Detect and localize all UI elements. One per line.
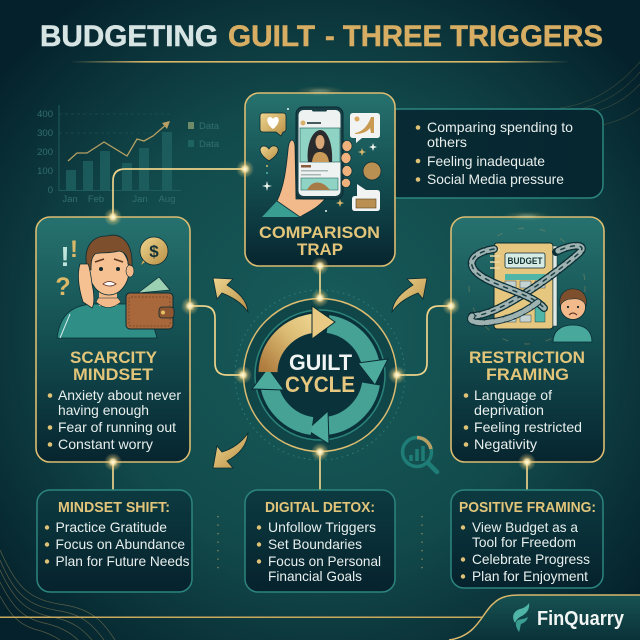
arrow: gold cycle segment bbox=[268, 306, 335, 372]
heading: comparison trap: COMPARISON bbox=[259, 223, 380, 242]
panel: comparison details bbox=[385, 109, 603, 198]
logo wordmark: FinQuarry bbox=[537, 608, 625, 630]
bullet list: digital detox bbox=[257, 519, 381, 584]
bullet list: digital detox: Focus on Personal bbox=[268, 553, 381, 569]
bullet list: positive framing: Tool for Freedom bbox=[472, 534, 576, 550]
title underline bbox=[70, 61, 570, 63]
bullet list: scarcity: Constant worry bbox=[58, 436, 153, 452]
icon: sad person bbox=[553, 289, 592, 342]
icon: gold heart bbox=[260, 146, 278, 161]
heading: restriction framing: RESTRICTION bbox=[469, 348, 585, 367]
guilt cycle diagram bbox=[235, 290, 405, 460]
bullet list: mindset shift: Practice Gratitude bbox=[56, 519, 167, 535]
icon: shoe speech bubble bbox=[350, 113, 380, 143]
bullet list: mindset shift: Plan for Future Needs bbox=[56, 553, 190, 569]
bullet list: scarcity: having enough bbox=[58, 402, 149, 418]
bullet list: restriction: deprivation bbox=[474, 402, 544, 418]
label: guilt cycle bbox=[285, 350, 355, 397]
icon: finquarry leaf logo bbox=[513, 603, 529, 632]
icon: budget calculator in chains: BUDGET bbox=[508, 256, 543, 267]
icon: magnifier chart bbox=[402, 438, 437, 472]
icon: heart speech bubble bbox=[260, 113, 286, 136]
glowing connector nodes bbox=[104, 86, 551, 471]
bullet list: comparison: others bbox=[427, 134, 467, 150]
bullet list: mindset shift bbox=[45, 519, 189, 569]
title: BUDGETING bbox=[40, 20, 218, 53]
bullet list: restriction: Language of bbox=[474, 387, 552, 403]
background bar chart: Aug bbox=[159, 194, 175, 205]
bullet list: positive framing: Plan for Enjoyment bbox=[472, 568, 588, 584]
label: guilt cycle: GUILT bbox=[289, 350, 353, 375]
dotted dividers bbox=[218, 516, 422, 572]
bullet list: digital detox: Financial Goals bbox=[268, 568, 362, 584]
title bbox=[40, 20, 603, 53]
background bar chart: Data bbox=[199, 121, 220, 132]
background bar chart: 100 bbox=[37, 166, 53, 177]
panel: mindset shift bbox=[37, 490, 192, 592]
arrow: teal cycle segment bottom bbox=[307, 384, 371, 444]
bullet list: positive framing: Celebrate Progress bbox=[472, 551, 590, 567]
background bar chart: Jan bbox=[62, 194, 78, 205]
icon: dollar coin bubble bbox=[140, 237, 168, 265]
connector lines bbox=[113, 169, 527, 490]
background bar chart: Jan bbox=[132, 194, 148, 205]
bullet list: positive framing: View Budget as a bbox=[472, 519, 578, 535]
icon: coin bbox=[363, 162, 381, 180]
bullet list: scarcity: Fear of running out bbox=[58, 419, 176, 435]
panel: restriction framing bbox=[451, 217, 604, 462]
background bar chart: Data bbox=[199, 139, 220, 150]
bullet list: comparison: Comparing spending to bbox=[427, 119, 573, 135]
heading: restriction framing bbox=[469, 348, 585, 384]
heading: scarcity mindset bbox=[70, 348, 158, 384]
background bar chart: 400 bbox=[37, 109, 53, 120]
panel: comparison trap bbox=[245, 93, 395, 266]
bullet list: restriction: Negativity bbox=[474, 436, 537, 452]
icon: hand holding phone bbox=[262, 107, 352, 217]
arrow: teal cycle segment right bbox=[328, 324, 388, 385]
background bar chart: Feb bbox=[88, 194, 104, 205]
title: GUILT bbox=[228, 20, 315, 53]
heading: comparison trap: TRAP bbox=[297, 240, 343, 259]
arrow: gold bottom left bbox=[213, 433, 248, 468]
icon: sparkles bbox=[262, 108, 377, 212]
arrow: teal cycle segment left bbox=[252, 368, 312, 426]
bullet list: comparison: Feeling inadequate bbox=[427, 153, 545, 169]
icon: dollar coin bubble: $ bbox=[149, 242, 159, 261]
background bar chart bbox=[37, 105, 220, 205]
title: - THREE TRIGGERS bbox=[325, 20, 603, 53]
heading: comparison trap bbox=[259, 223, 380, 259]
background bar chart: 300 bbox=[37, 128, 53, 139]
arrow: gold top left bbox=[213, 278, 248, 312]
label: guilt cycle: CYCLE bbox=[285, 372, 355, 397]
panel: digital detox bbox=[245, 490, 395, 592]
heading: scarcity mindset: MINDSET bbox=[73, 365, 154, 384]
icon: wallet speech bubble bbox=[352, 184, 380, 211]
heading: scarcity mindset: SCARCITY bbox=[70, 348, 158, 367]
icon: question and exclamation marks: ! bbox=[60, 241, 70, 272]
bullet list: digital detox: Set Boundaries bbox=[268, 536, 362, 552]
panel: scarcity mindset bbox=[36, 217, 190, 462]
footer logo tab bbox=[449, 595, 640, 640]
icon: question and exclamation marks bbox=[55, 236, 78, 301]
bullet list: scarcity: Anxiety about never bbox=[58, 387, 181, 403]
background bar chart: 0 bbox=[48, 185, 53, 196]
bullet list: digital detox: Unfollow Triggers bbox=[268, 519, 376, 535]
background bar chart: 200 bbox=[37, 147, 53, 158]
decorative waves: top right bbox=[560, 62, 640, 128]
bullet list: mindset shift: Focus on Abundance bbox=[56, 536, 185, 552]
bullet list: comparison bbox=[416, 119, 573, 187]
heading: positive framing: POSITIVE FRAMING: bbox=[459, 499, 596, 516]
bullet list: comparison: Social Media pressure bbox=[427, 171, 564, 187]
panel: positive framing bbox=[451, 490, 603, 588]
heading: digital detox: DIGITAL DETOX: bbox=[265, 499, 375, 516]
icon: worried person with wallet bbox=[57, 235, 174, 338]
bullet list: restriction bbox=[464, 387, 582, 452]
bullet list: positive framing bbox=[461, 519, 590, 584]
icon: budget calculator in chains bbox=[469, 228, 585, 344]
decorative waves: bottom left bbox=[0, 550, 115, 640]
bullet list: restriction: Feeling restricted bbox=[474, 419, 582, 435]
icon: question and exclamation marks: ! bbox=[70, 236, 78, 263]
footer gold rule bbox=[0, 616, 485, 618]
arrow: gold top right bbox=[392, 278, 427, 312]
icon: question and exclamation marks: ? bbox=[55, 273, 71, 301]
heading: restriction framing: FRAMING bbox=[486, 365, 569, 384]
heading: mindset shift: MINDSET SHIFT: bbox=[58, 499, 170, 516]
bullet list: scarcity bbox=[48, 387, 181, 452]
